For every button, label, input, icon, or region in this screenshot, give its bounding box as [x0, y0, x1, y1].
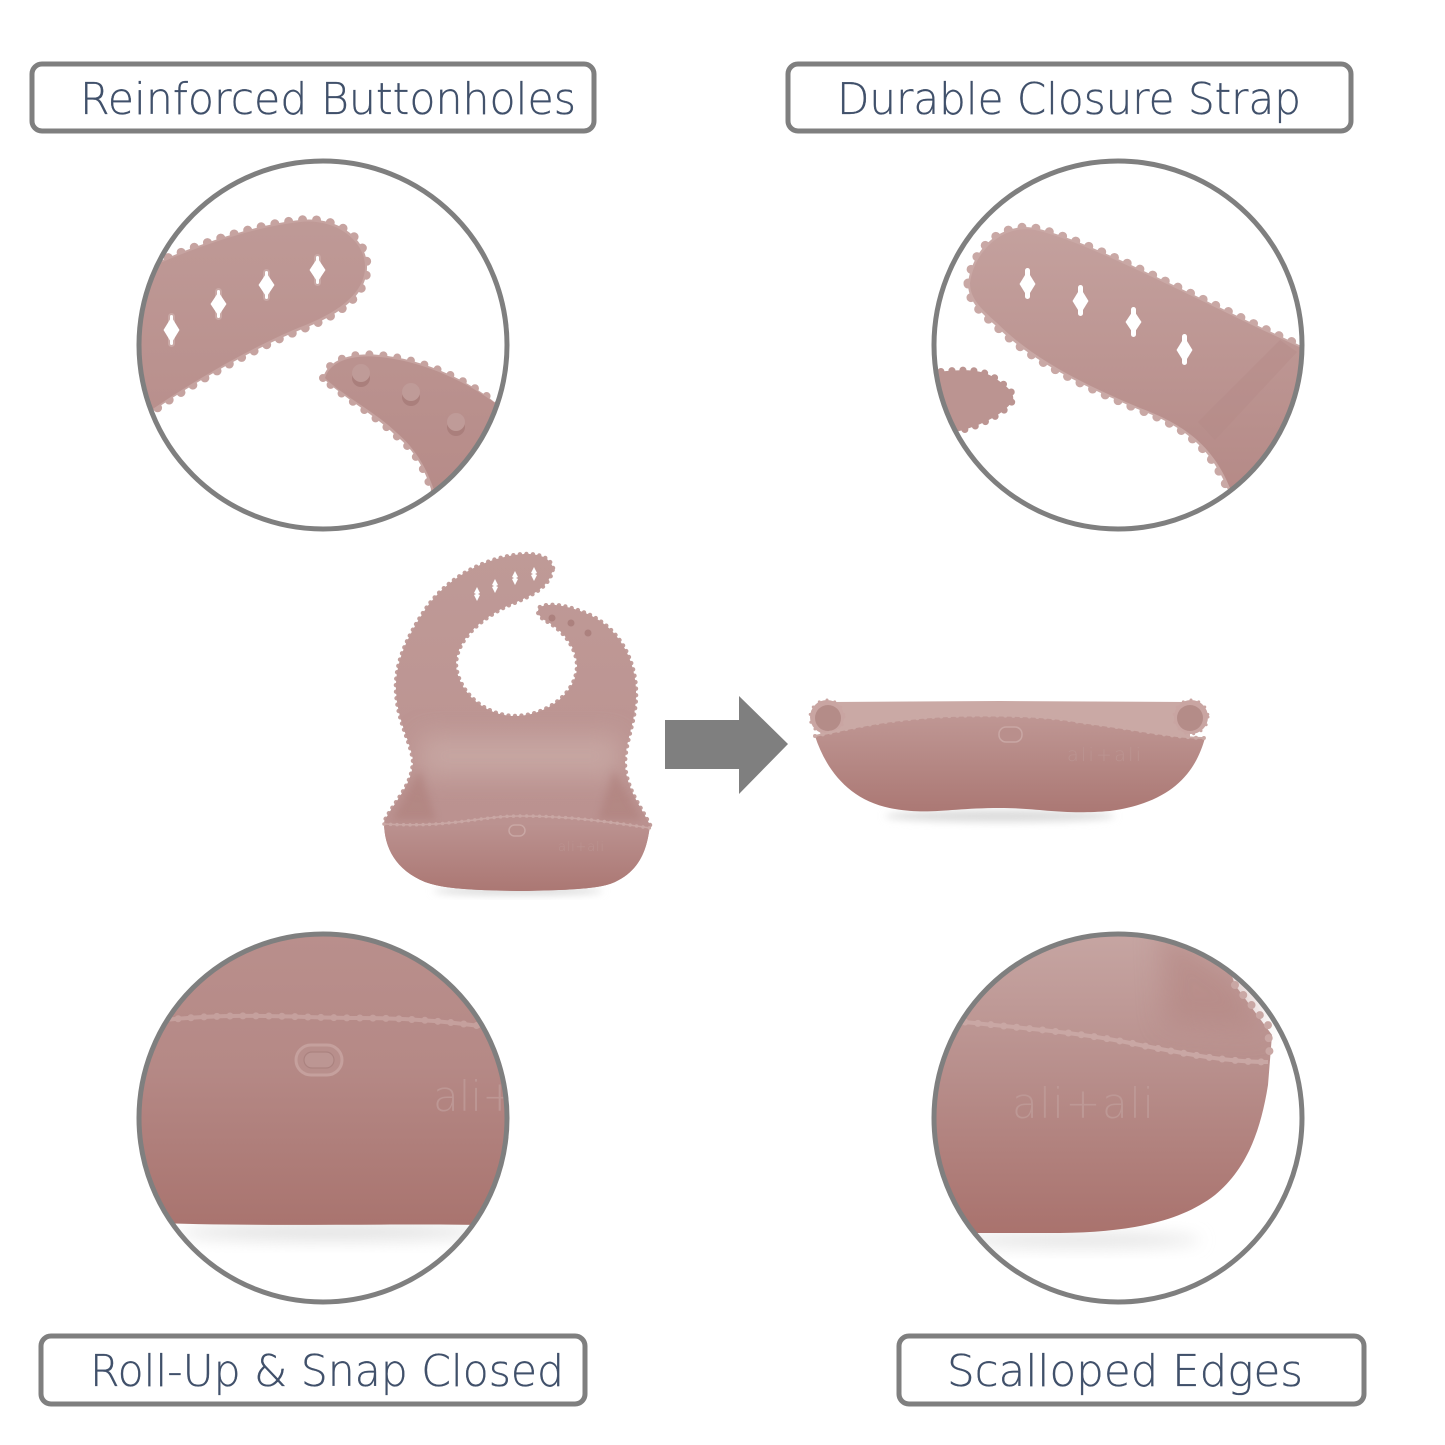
label: Roll-Up & Snap Closed: Roll-Up & Snap Closed: [90, 1346, 564, 1397]
label: Scalloped Edges: [899, 1336, 1364, 1404]
scalloped side edge: [1235, 985, 1270, 1062]
bib corner surface: [925, 925, 1272, 1233]
label: Reinforced Buttonholes: Reinforced Buttonholes: [80, 74, 576, 125]
label: Roll-Up & Snap Closed: [41, 1336, 585, 1404]
bib scalloped edge: [384, 554, 650, 825]
pocket scalloped ridge: [384, 816, 650, 828]
label: Durable Closure Strap: [788, 64, 1351, 131]
fold highlight and pocket shading: [384, 735, 650, 900]
darker pocket shading: [1160, 942, 1270, 1030]
product: rolled-up bib: [810, 700, 1208, 822]
scalloped ridge: [165, 1016, 480, 1026]
label: Durable Closure Strap: Durable Closure Strap: [837, 74, 1301, 125]
embossed logo: ali+ali: [1067, 744, 1141, 766]
scalloped ridge: [965, 1022, 1268, 1062]
snap button: [296, 1045, 342, 1075]
embossed logo: ali+ali: [433, 1072, 566, 1121]
shadow under bib: [180, 1224, 480, 1240]
rolled bib shadow: [885, 810, 1115, 822]
panel: buttonholes close-up circle: [130, 161, 507, 529]
arrow: [665, 696, 788, 794]
rolled bib surface: [142, 936, 504, 1225]
scalloped ridge: [815, 715, 1205, 738]
strap with snap pegs: [323, 354, 500, 492]
snap slot: [509, 825, 525, 836]
embossed logo: ali+ali: [1012, 1079, 1154, 1128]
closure strap: [968, 227, 1325, 500]
rolled bib front: [815, 715, 1205, 812]
panel: scalloped edges close-up circle: [925, 925, 1302, 1302]
strap with buttonholes: [130, 220, 367, 425]
bib shadow: [433, 887, 603, 895]
snap button: [999, 727, 1022, 742]
bib body: [384, 554, 650, 891]
panel: snap closure close-up circle: [136, 932, 510, 1304]
left roll end: [810, 700, 844, 734]
label: Reinforced Buttonholes: [32, 64, 594, 131]
small strap tip: [930, 370, 1013, 432]
embossed logo: ali+ali: [558, 840, 604, 855]
shadow under bib: [960, 1233, 1200, 1247]
product: open bib: [384, 554, 650, 900]
right roll end: [1174, 700, 1208, 734]
label: Scalloped Edges: Scalloped Edges: [947, 1346, 1303, 1397]
snap pegs: [548, 614, 592, 636]
buttonholes: [474, 567, 537, 601]
panel: closure strap close-up circle: [930, 161, 1325, 529]
rolled bib back: [830, 701, 1190, 740]
